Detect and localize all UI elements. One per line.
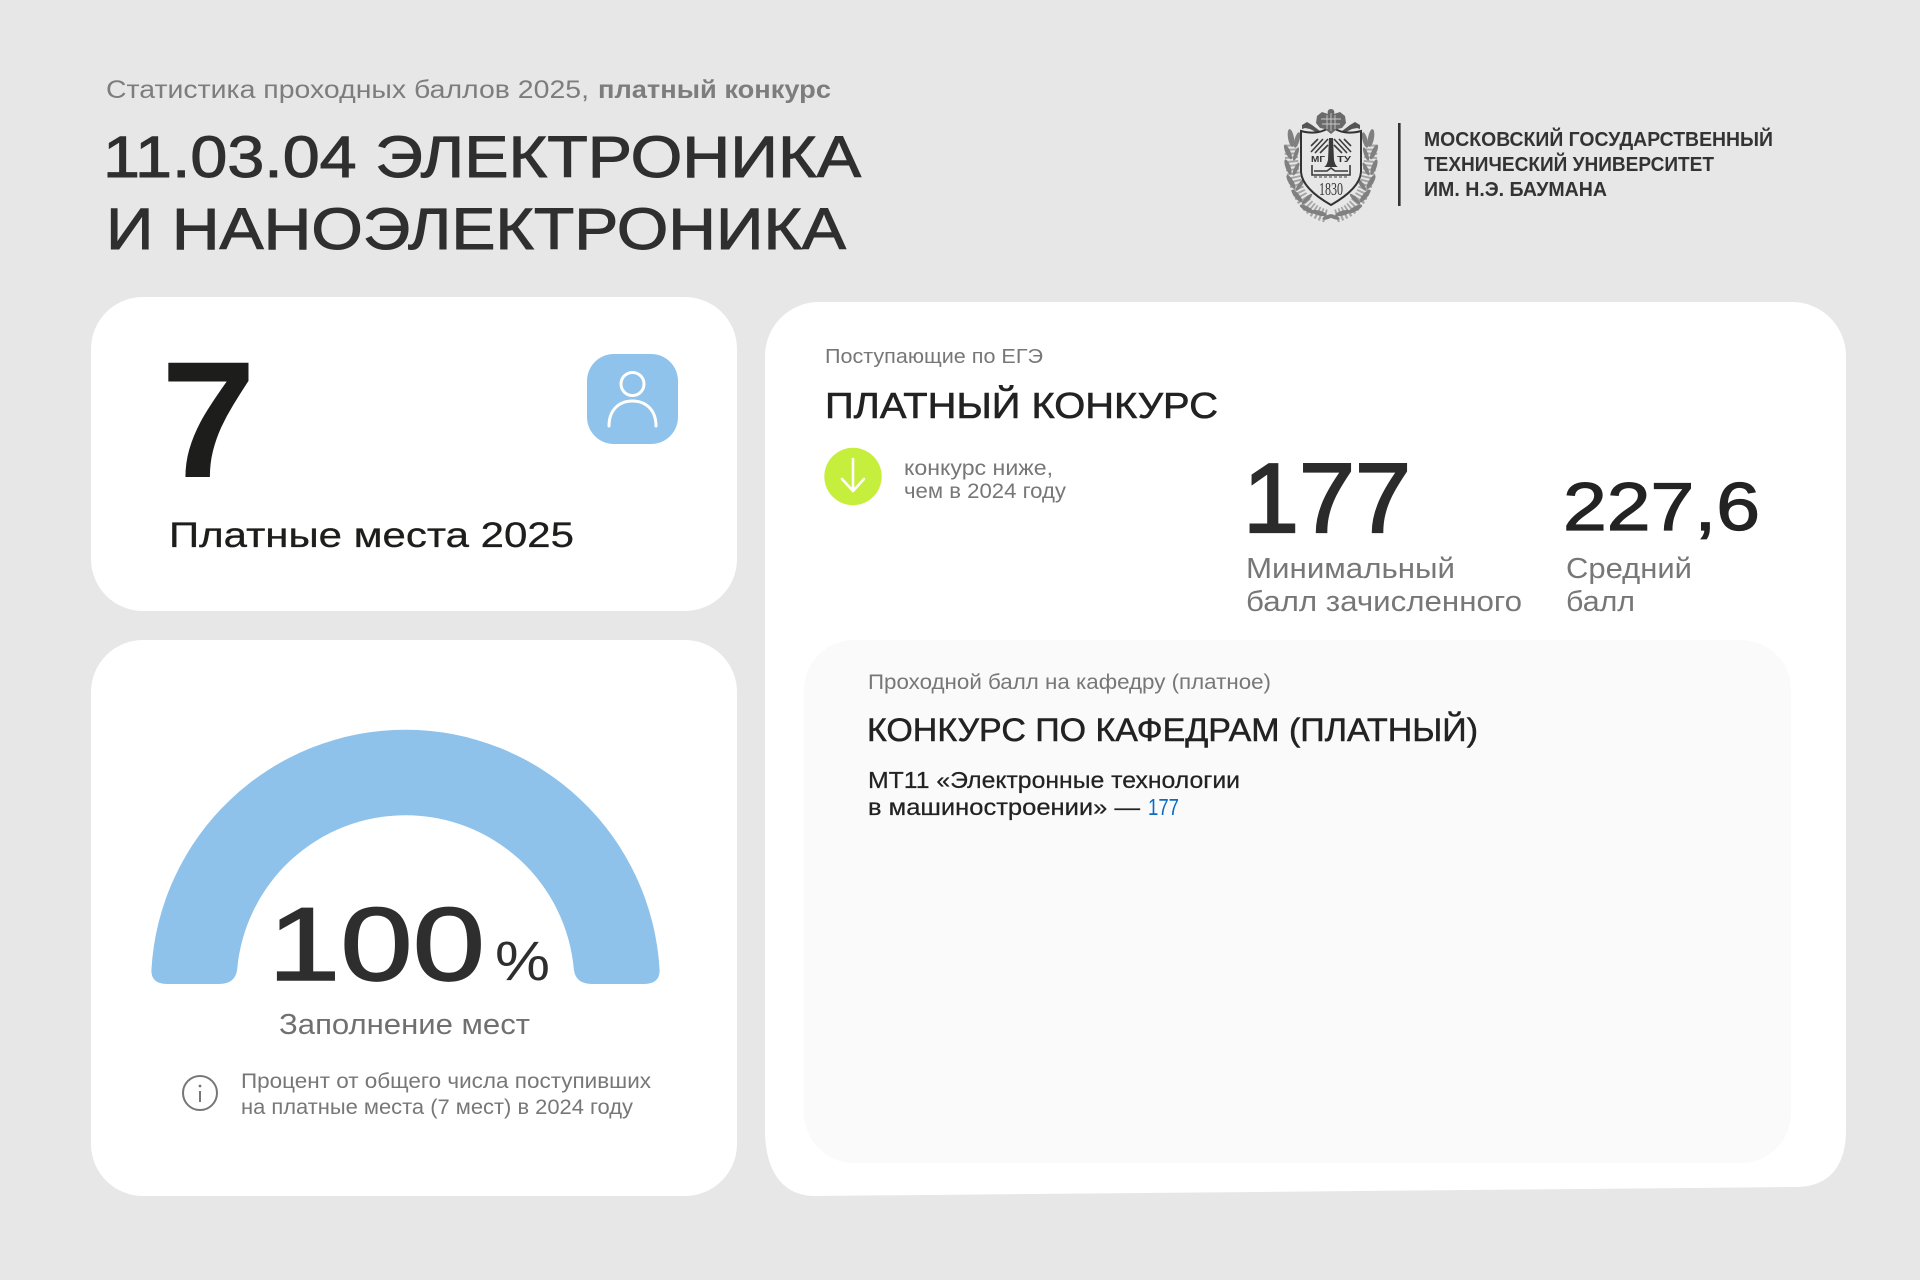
header subtitle <box>106 76 831 104</box>
university name <box>1424 127 1773 201</box>
department entry: 177 <box>1148 794 1179 820</box>
trend note <box>904 457 1067 503</box>
icon: university crest: ТУ <box>1337 155 1352 164</box>
trend note: конкурс ниже, <box>904 457 1053 480</box>
departments eyebrow: Проходной балл на кафедру (платное) <box>868 671 1271 694</box>
main title: 11.03.04 ЭЛЕКТРОНИКА <box>103 125 861 190</box>
icon: info <box>183 1076 217 1110</box>
section heading: ПЛАТНЫЙ КОНКУРС <box>825 384 1218 426</box>
panel: paid places <box>91 297 737 611</box>
icon: university crest: 1830 <box>1319 179 1343 199</box>
gauge value: 100 <box>268 887 485 1003</box>
gauge value <box>268 887 550 1003</box>
stat: minimum score: 177 <box>1243 443 1411 553</box>
stat: average score: балл <box>1566 586 1635 618</box>
panel: paid competition <box>765 302 1846 1196</box>
icon: down arrow <box>824 448 882 505</box>
gauge label: Заполнение мест <box>279 1009 530 1041</box>
stat: minimum score <box>1243 443 1522 618</box>
department entry: МТ11 «Электронные технологии <box>868 767 1240 793</box>
label: paid places 2025: Платные места 2025 <box>169 516 574 555</box>
university name: МОСКОВСКИЙ ГОСУДАРСТВЕННЫЙ <box>1424 127 1773 151</box>
trend note: чем в 2024 году <box>904 480 1067 503</box>
header subtitle: Статистика проходных баллов 2025, <box>106 76 589 104</box>
panel: seat filling <box>91 640 737 1196</box>
stat: average score: 227,6 <box>1563 469 1760 545</box>
panel: departments <box>804 640 1791 1163</box>
main title <box>103 125 861 262</box>
footnote <box>241 1070 652 1119</box>
footnote: на платные места (7 мест) в 2024 году <box>241 1096 634 1119</box>
gauge value: % <box>495 929 550 992</box>
section eyebrow: Поступающие по ЕГЭ <box>825 346 1043 368</box>
header subtitle: платный конкурс <box>598 76 831 104</box>
department entry <box>868 767 1240 820</box>
departments heading: КОНКУРС ПО КАФЕДРАМ (ПЛАТНЫЙ) <box>867 712 1478 748</box>
university name: ТЕХНИЧЕСКИЙ УНИВЕРСИТЕТ <box>1424 152 1714 176</box>
university name: ИМ. Н.Э. БАУМАНА <box>1424 179 1607 201</box>
icon: person <box>587 354 678 444</box>
icon: university crest: МГ <box>1311 155 1326 164</box>
university logo <box>1282 109 1773 221</box>
stat: minimum score: Минимальный <box>1246 553 1455 585</box>
stat: average score <box>1563 469 1760 618</box>
gauge arc <box>151 730 660 984</box>
footnote: Процент от общего числа поступивших <box>241 1070 652 1093</box>
icon: university crest <box>1282 109 1380 221</box>
stat: minimum score: балл зачисленного <box>1246 586 1522 618</box>
big number 7: 7 <box>161 328 256 513</box>
main title: И НАНОЭЛЕКТРОНИКА <box>106 197 846 262</box>
stat: average score: Средний <box>1566 553 1692 585</box>
department entry: в машиностроении» — <box>868 794 1140 820</box>
